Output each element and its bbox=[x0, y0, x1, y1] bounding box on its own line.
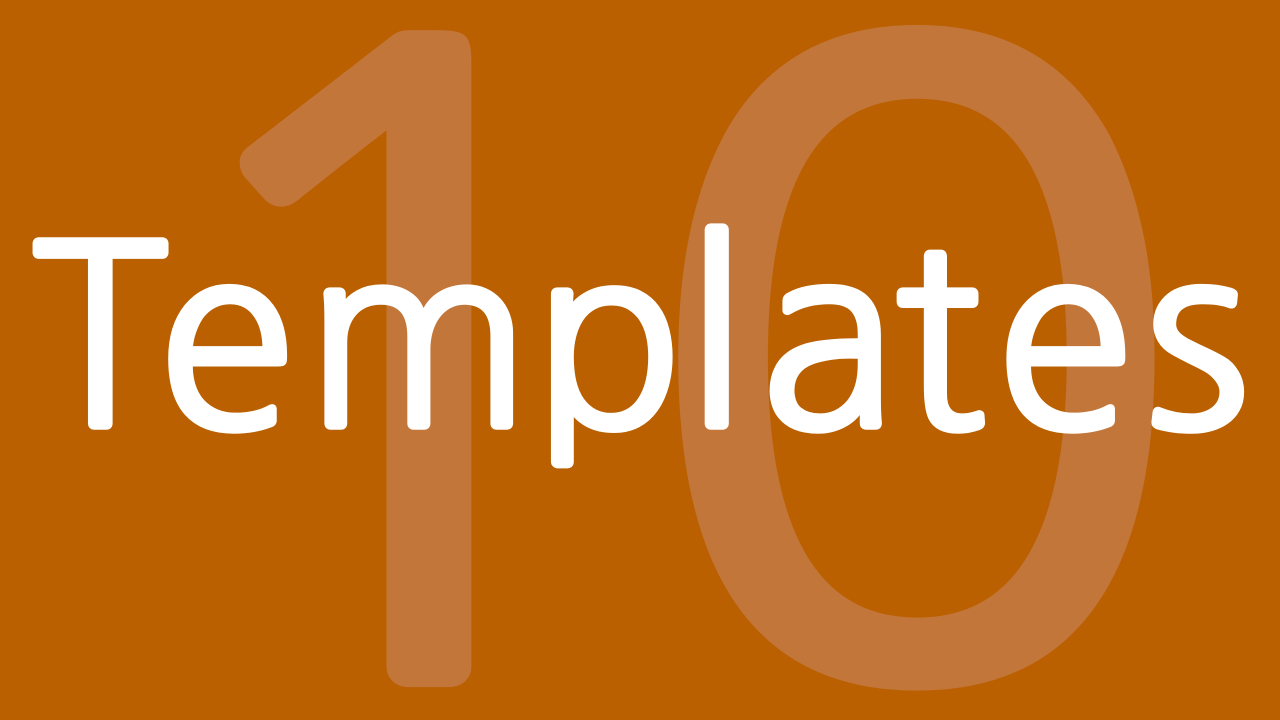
heading: Templates: Templates bbox=[30, 212, 1250, 466]
